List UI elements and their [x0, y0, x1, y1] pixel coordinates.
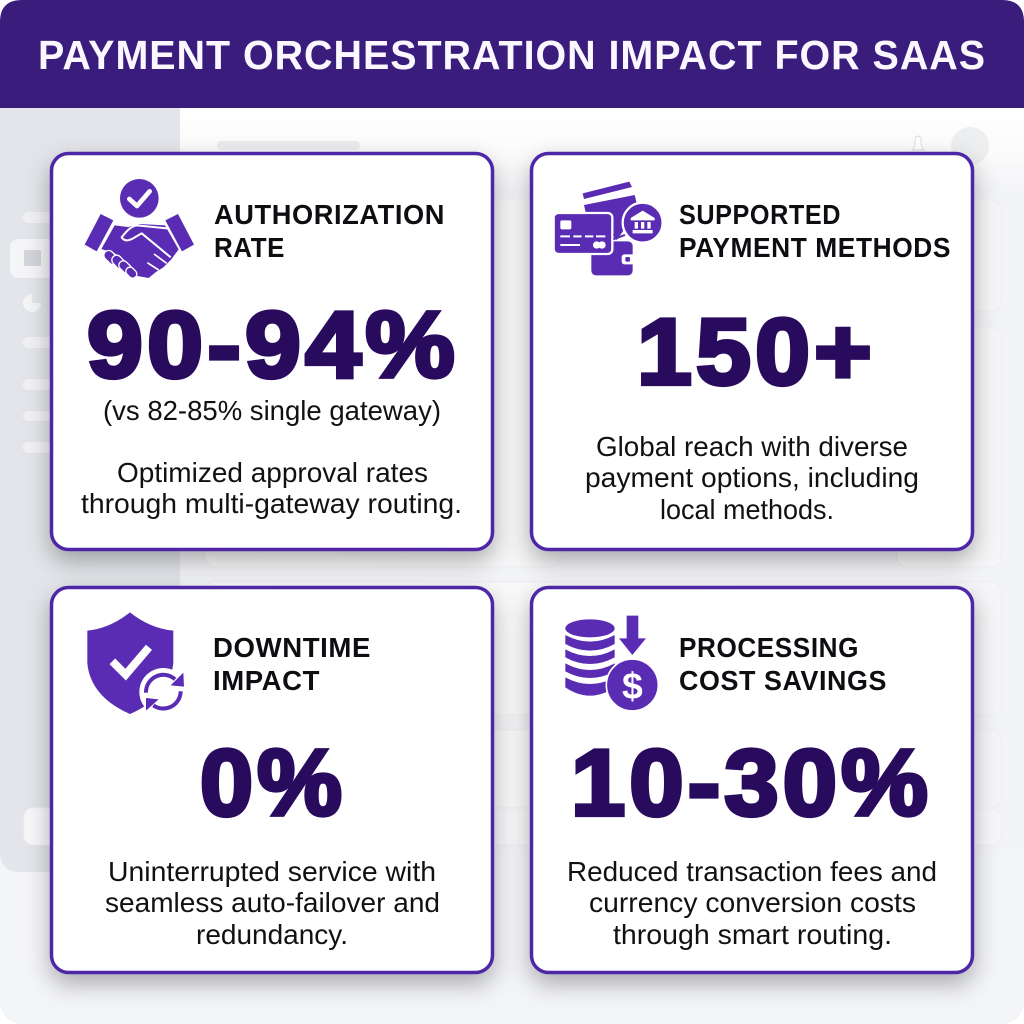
title: PAYMENT ORCHESTRATION IMPACT FOR SAAS: [38, 32, 986, 78]
description: Reduced transaction fees and: [567, 856, 937, 887]
metric: 10-30%: [571, 730, 932, 835]
panel: supported payment methods: [532, 154, 972, 550]
description: redundancy.: [196, 919, 348, 950]
panel: authorization rate: [52, 154, 492, 550]
comparison note: (vs 82-85% single gateway): [103, 395, 441, 426]
icon: shield with check and refresh: [87, 612, 187, 716]
heading: PROCESSING: [679, 632, 859, 663]
description: currency conversion costs: [589, 887, 916, 918]
panel: processing cost savings: [532, 588, 972, 972]
heading: PAYMENT METHODS: [679, 232, 951, 263]
heading: IMPACT: [213, 665, 320, 696]
description: local methods.: [660, 494, 834, 525]
icon: coin stack with down arrow and dollar: [565, 616, 658, 711]
heading: AUTHORIZATION: [214, 199, 445, 230]
header banner: [0, 0, 1024, 108]
metric: 150+: [637, 299, 876, 404]
metric: 90-94%: [87, 292, 459, 397]
icon: handshake with check: [85, 179, 194, 278]
description: through multi-gateway routing.: [81, 488, 462, 519]
description: payment options, including: [585, 462, 919, 493]
heading: SUPPORTED: [679, 199, 841, 230]
description: Uninterrupted service with: [108, 856, 436, 887]
panel: downtime impact: [52, 588, 492, 972]
heading: RATE: [214, 232, 285, 263]
description: Optimized approval rates: [117, 457, 428, 488]
icon: coin stack with down arrow and dollar: $: [622, 664, 643, 706]
description: through smart routing.: [613, 919, 892, 950]
heading: COST SAVINGS: [679, 665, 887, 696]
description: seamless auto-failover and: [105, 887, 440, 918]
description: Global reach with diverse: [596, 431, 908, 462]
icon: cards, wallet and bank: [554, 182, 663, 275]
heading: DOWNTIME: [213, 632, 371, 663]
metric: 0%: [200, 730, 346, 835]
